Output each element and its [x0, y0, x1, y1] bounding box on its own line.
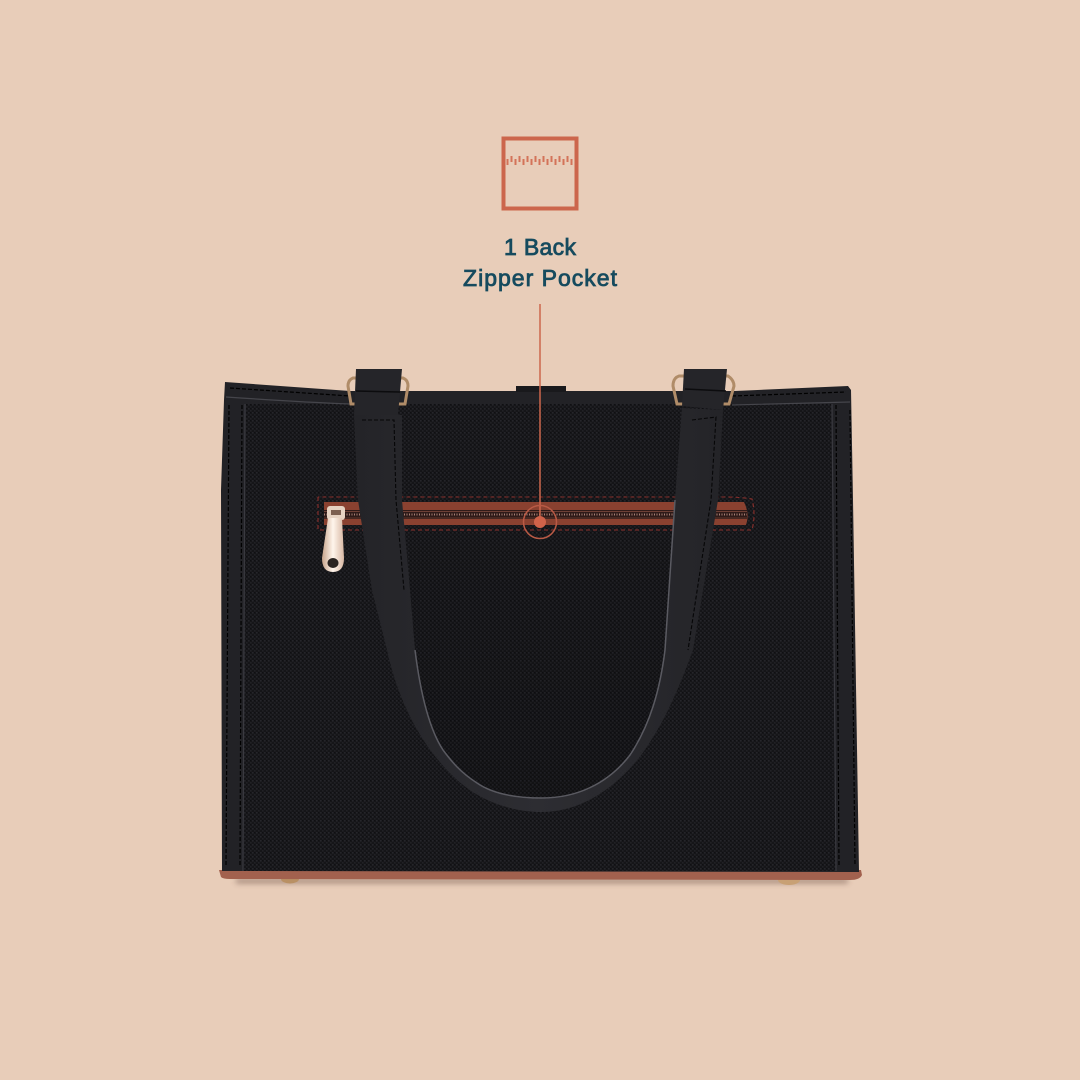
zipper pull [322, 506, 345, 572]
heading: 1 Back Zipper Pocket: 1 Back [504, 234, 576, 260]
zipper tape [324, 502, 748, 525]
left buckle ring [348, 378, 408, 404]
side panel stitching [226, 388, 855, 866]
right buckle ring [673, 376, 734, 404]
callout: leader line and marker [524, 304, 556, 538]
right loop [682, 369, 727, 410]
side panel seams [243, 404, 836, 871]
strap stitching [362, 417, 716, 650]
bag feet [281, 874, 800, 885]
strap with loops [354, 369, 727, 812]
strap body [354, 408, 723, 812]
bag body leather frame [221, 382, 859, 872]
bag: back view [219, 369, 862, 885]
shade inside the strap loop [402, 410, 681, 798]
top band stitching [226, 397, 850, 405]
left loop [354, 369, 402, 415]
heading: 1 Back Zipper Pocket: Zipper Pocket [463, 265, 618, 291]
zipper pocket [318, 497, 754, 530]
zipper teeth [324, 510, 747, 519]
icon: zipper pocket [504, 138, 576, 208]
tan base trim [219, 870, 862, 880]
ground shadow [236, 879, 848, 883]
heading: 1 Back Zipper Pocket [463, 234, 618, 291]
woven canvas panel [243, 404, 836, 871]
centre top tab [516, 386, 566, 392]
red stitching outline [318, 497, 754, 530]
strap highlight edges [415, 500, 675, 798]
